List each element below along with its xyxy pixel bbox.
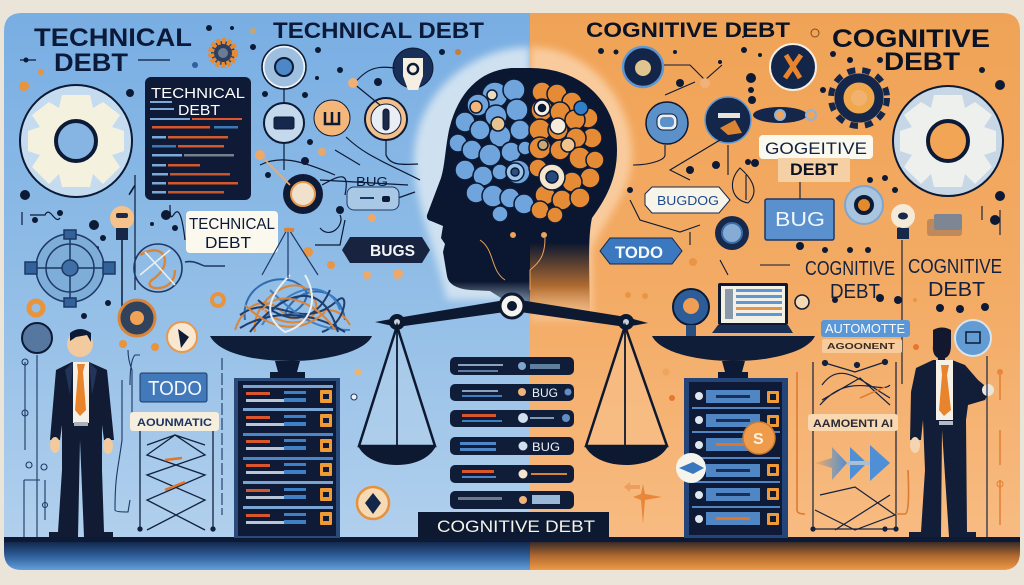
icons: technical circles xyxy=(262,45,433,214)
title: technical debt left xyxy=(34,24,192,77)
label: todo xyxy=(140,373,207,402)
label: technical debt: TECHNICAL xyxy=(189,216,275,233)
label: todo hex xyxy=(600,238,682,264)
head circuit lines xyxy=(480,232,546,290)
line: sign pole xyxy=(987,356,1003,537)
scale: right pan xyxy=(585,326,668,465)
tangled cables xyxy=(235,228,350,332)
text: cognitive debt duplicate two: DEBT xyxy=(928,279,985,301)
rack rows xyxy=(692,390,780,525)
laptop xyxy=(686,283,793,336)
icons: lower left circles xyxy=(22,294,224,353)
title: cognitive debt right: DEBT xyxy=(884,48,960,76)
label: gogeitive debt: GOGEITIVE xyxy=(765,139,867,158)
label: cognitive debt box: COGNITIVE DEBT xyxy=(437,517,595,536)
label: cognitive debt box xyxy=(418,512,609,537)
icon: cognitive dots xyxy=(598,29,1005,401)
orange lobes xyxy=(529,82,604,223)
label: todo: TODO xyxy=(148,378,202,400)
icon: large gear right xyxy=(893,86,1003,196)
icon: lightbulb left xyxy=(110,206,134,240)
center list xyxy=(450,357,574,509)
label: bugs: BUGS xyxy=(370,243,415,260)
scale: right bowl xyxy=(652,336,815,378)
lattice right xyxy=(797,360,909,531)
icon: lamp right xyxy=(891,204,915,239)
lattice left xyxy=(138,431,215,531)
code panel heading xyxy=(151,85,245,119)
server rack left xyxy=(234,378,340,538)
icon: rack badges: S xyxy=(753,431,764,448)
brain xyxy=(449,79,604,223)
icon: orange cross xyxy=(624,482,662,524)
center list details: BUG xyxy=(532,386,558,400)
scale: left pan xyxy=(358,326,436,465)
panel: cognitive debt background xyxy=(530,13,1020,570)
label: automotte: AUTOMOTTE xyxy=(825,321,905,336)
title: cognitive debt right xyxy=(832,25,990,76)
label: automatic xyxy=(130,412,219,431)
title: technical debt left: DEBT xyxy=(54,49,128,77)
title: technical debt left: TECHNICAL xyxy=(34,24,192,52)
panel: technical debt background xyxy=(4,13,530,570)
blue lobes xyxy=(449,79,534,222)
code panel heading: DEBT xyxy=(178,102,220,119)
text: cognitive debt duplicate one: COGNITIVE xyxy=(805,258,895,280)
label: bugdog xyxy=(645,187,730,213)
wires: technical network xyxy=(20,60,420,330)
icon: cognitive connector xyxy=(753,107,816,123)
lines: left man side wires xyxy=(22,350,222,537)
label: automatic: AOUNMATIC xyxy=(137,417,212,429)
man: technical debt xyxy=(49,329,114,537)
center list details xyxy=(458,362,572,504)
man: cognitive debt xyxy=(909,328,994,537)
label: technical debt: DEBT xyxy=(205,235,251,252)
icon: diamond badge xyxy=(351,368,389,519)
code panel heading: TECHNICAL xyxy=(151,85,245,102)
head silhouette xyxy=(427,68,617,325)
title: cognitive debt top: COGNITIVE DEBT xyxy=(586,19,790,42)
text: cognitive debt duplicate one: DEBT xyxy=(830,281,880,303)
label: agoonet xyxy=(822,339,902,353)
title: technical debt top: TECHNICAL DEBT xyxy=(273,18,485,43)
label: gogeitive debt xyxy=(759,135,873,182)
text: cognitive debt duplicate two: COGNITIVE xyxy=(908,256,1002,278)
icon: navy gear xyxy=(831,70,887,126)
label: bug blue xyxy=(765,199,834,240)
label: aamoenti ai: AAMOENTI AI xyxy=(813,418,893,430)
label: todo hex: TODO xyxy=(615,243,663,262)
icon: lower left gear xyxy=(25,230,115,307)
icon: tangled ball xyxy=(134,244,225,292)
label: technical debt xyxy=(186,211,278,253)
title: cognitive debt right: COGNITIVE xyxy=(832,25,990,53)
text: cognitive debt duplicate two xyxy=(908,256,1002,301)
label: bugdog: BUGDOG xyxy=(657,193,719,208)
label: aamoenti ai xyxy=(808,414,898,431)
center list details: BUG xyxy=(532,440,560,454)
label: bug blue: BUG xyxy=(775,209,825,231)
icon: technical dots xyxy=(19,25,461,319)
code lines xyxy=(150,101,242,194)
wires: cognitive network xyxy=(630,65,1000,384)
label: bug xyxy=(347,174,399,210)
arrows: triple chevrons xyxy=(815,445,890,481)
icon: small orange gear xyxy=(211,41,235,65)
text: cognitive debt duplicate one xyxy=(805,258,895,303)
icon: rack badges xyxy=(676,422,775,483)
scale beam xyxy=(375,294,648,330)
label: agoonet: AGOONENT xyxy=(827,342,895,351)
label: gogeitive debt: DEBT xyxy=(790,160,839,179)
label: bugs xyxy=(342,237,430,263)
head halo xyxy=(414,47,632,320)
label: bug: BUG xyxy=(356,174,388,189)
server rack right xyxy=(684,378,788,538)
icons: cognitive circles xyxy=(623,44,991,356)
icon: printer xyxy=(927,214,962,236)
icon: large gear left xyxy=(20,85,132,197)
rack rows xyxy=(243,385,333,525)
scale: left bowl xyxy=(210,336,372,378)
code panel xyxy=(145,77,251,200)
